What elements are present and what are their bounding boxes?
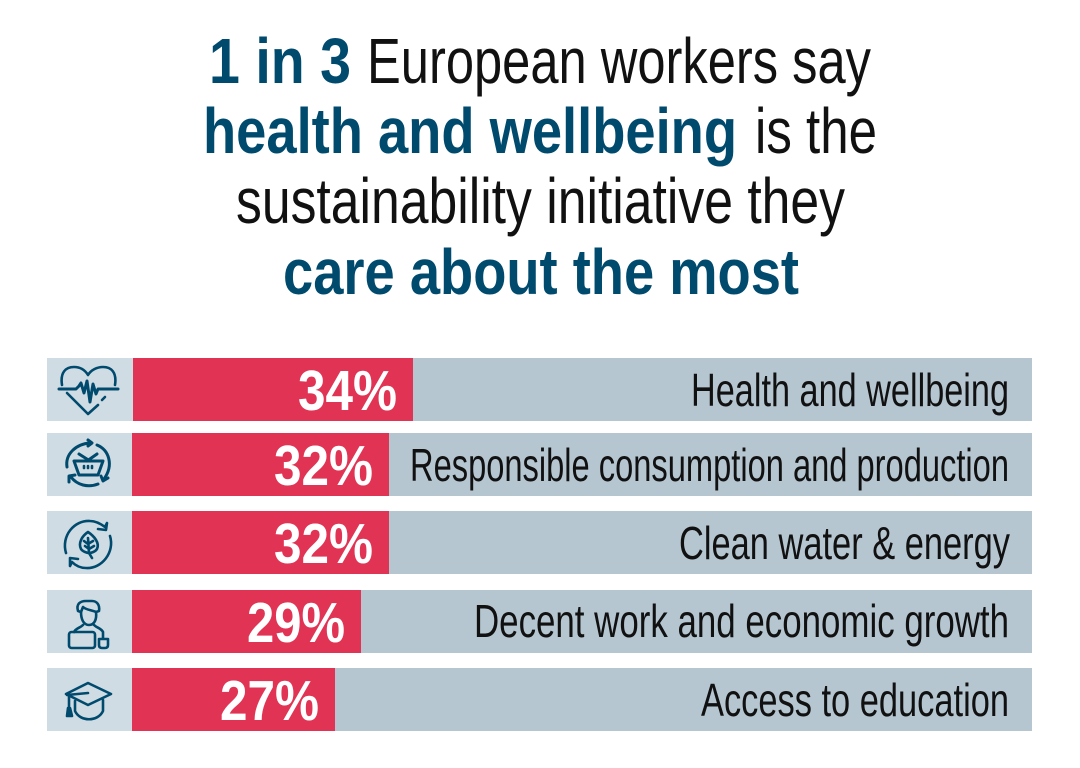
bar row: responsible consumption 32% xyxy=(47,433,1032,498)
icon: heart with pulse xyxy=(59,367,118,414)
title: sustainability initiative they xyxy=(236,165,845,237)
value: 27%: 27% xyxy=(220,669,319,733)
value: 32%: 32% xyxy=(274,512,373,576)
title: health and wellbeing xyxy=(203,95,737,167)
value: 29%: 29% xyxy=(247,591,345,655)
icon: basket in recycling arrows xyxy=(67,440,109,486)
icon: graduation cap xyxy=(66,683,111,719)
bar row: access to education 27% xyxy=(47,668,1032,733)
title: 1 in 3 xyxy=(209,25,351,97)
bar row: health and wellbeing 34% xyxy=(47,358,1032,423)
value: 32%: 32% xyxy=(274,434,373,498)
bar row: clean water and energy 32% xyxy=(47,511,1032,576)
bar row: decent work 29% xyxy=(47,590,1032,655)
title: care about the most xyxy=(283,236,799,308)
title: is the xyxy=(755,95,877,167)
title: European workers say xyxy=(367,25,871,97)
title xyxy=(203,25,877,308)
icon: person at laptop xyxy=(69,601,108,648)
value: 34%: 34% xyxy=(298,359,397,423)
icon: leaf in circular arrows xyxy=(65,521,111,568)
